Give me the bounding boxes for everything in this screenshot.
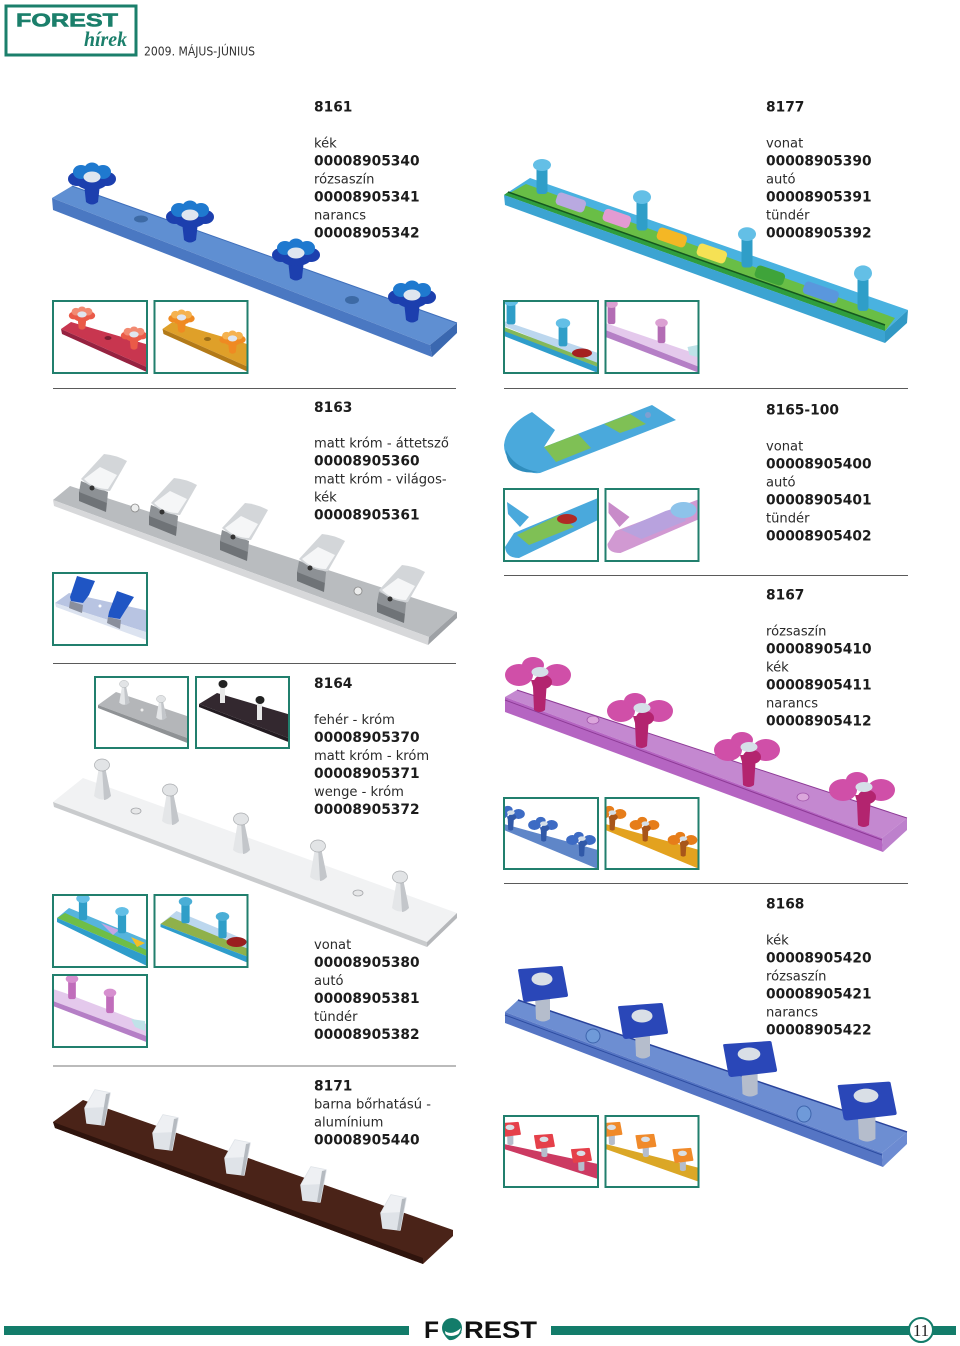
product text 8171: barna bőrhatású - xyxy=(314,1098,431,1112)
logo: Forest hírek: hírek xyxy=(84,27,127,51)
logo: Forest hírek xyxy=(6,6,136,55)
product text 8168: 00008905420 xyxy=(766,950,872,966)
product text 8167: narancs xyxy=(766,696,818,712)
product text 8165-100: vonat xyxy=(766,440,803,454)
product text 8161 xyxy=(314,100,420,242)
product text 8167 xyxy=(766,588,872,730)
product text 8161: rózsaszín xyxy=(314,172,374,188)
product text 8164: 00008905371 xyxy=(314,766,420,782)
thumbnail: fairy hook xyxy=(606,489,700,561)
product text 8165-100: 8165-100 xyxy=(766,402,839,418)
product text 8171: 00008905440 xyxy=(314,1132,420,1148)
thumbnail: matt chrome xyxy=(95,677,190,748)
product text 8165-100: tündér xyxy=(766,512,810,526)
product text 8163: 8163 xyxy=(314,400,352,416)
product text 8165-100: 00008905402 xyxy=(766,528,872,544)
product text 8167: kék xyxy=(766,660,789,676)
logo: Forest hírek: FOREST xyxy=(16,10,119,30)
product text 8164: wenge - króm xyxy=(314,785,404,800)
product text 8167: 00008905410 xyxy=(766,642,872,658)
product text 8165-100 xyxy=(766,402,872,544)
product: white chrome rack xyxy=(53,759,457,947)
thumbnail: wenge xyxy=(196,677,291,748)
product text 8164: matt króm - króm xyxy=(314,749,429,764)
product text 8165-100: autó xyxy=(766,476,795,490)
product: train coat rack xyxy=(504,159,908,343)
panel: 8177 variants xyxy=(53,894,420,1047)
product text 8164: 00008905370 xyxy=(314,730,420,746)
thumbnail: train peg xyxy=(53,894,149,967)
text: train, car, fairy codes xyxy=(314,938,420,1043)
product text 8164 xyxy=(314,676,429,818)
product: chrome and glass rack xyxy=(53,454,457,645)
product text 8161: 00008905342 xyxy=(314,226,420,242)
product text 8163: matt króm - áttetsző xyxy=(314,436,449,452)
panel: 8163 xyxy=(53,400,457,645)
product text 8171 xyxy=(314,1078,431,1148)
panel: 8171 xyxy=(53,1078,453,1264)
product: blue square knob rack xyxy=(505,966,907,1167)
product text 8164: 00008905372 xyxy=(314,802,420,818)
text: train, car, fairy codes: 00008905381 xyxy=(314,991,420,1007)
product text 8177 xyxy=(766,100,872,242)
thumbnail: light blue variant xyxy=(53,573,149,645)
thumbnail: car peg xyxy=(154,895,248,967)
product text 8177: 8177 xyxy=(766,100,804,116)
product text 8163: 00008905360 xyxy=(314,454,420,470)
product text 8163: kék xyxy=(314,490,337,506)
product text 8167: rózsaszín xyxy=(766,624,826,640)
product text 8163: 00008905361 xyxy=(314,508,420,524)
product text 8168: 8168 xyxy=(766,896,804,912)
panel: 8161 xyxy=(52,100,457,373)
product text 8168: rózsaszín xyxy=(766,970,826,984)
product: curved child hook xyxy=(504,405,676,473)
product text 8164: 8164 xyxy=(314,676,352,692)
product text 8177: tündér xyxy=(766,208,810,224)
thumbnail: pink variant xyxy=(53,301,149,373)
product: blue flower rack xyxy=(52,162,457,357)
product text 8165-100: 00008905401 xyxy=(766,492,872,508)
product text 8161: kék xyxy=(314,136,337,152)
product text 8168: 00008905422 xyxy=(766,1022,872,1038)
thumbnail: car hook xyxy=(504,489,598,561)
product text 8164: fehér - króm xyxy=(314,713,395,728)
panel: 8164 xyxy=(53,676,457,947)
panel: 8167 xyxy=(495,588,907,869)
footer logo: REST xyxy=(464,1317,537,1344)
product text 8171: 8171 xyxy=(314,1078,352,1094)
page number: 11 xyxy=(913,1321,929,1340)
product text 8171: alumínium xyxy=(314,1116,383,1130)
thumbnail: orange variant xyxy=(154,301,250,373)
product text 8167: 8167 xyxy=(766,588,804,604)
thumbnail: orange clover xyxy=(597,798,700,869)
product text 8161: 00008905341 xyxy=(314,190,420,206)
product text 8168: 00008905421 xyxy=(766,986,872,1002)
page number xyxy=(909,1318,933,1342)
thumbnail: fairy peg xyxy=(53,975,149,1047)
product text 8167: 00008905411 xyxy=(766,678,872,694)
thumbnail: car variant xyxy=(504,296,598,373)
product text 8168 xyxy=(766,896,872,1038)
thumbnail: blue clover xyxy=(495,798,598,869)
text: train, car, fairy codes: 00008905380 xyxy=(314,955,420,971)
product text 8167: 00008905412 xyxy=(766,714,872,730)
product text 8161: 8161 xyxy=(314,100,352,116)
thumbnail: fairy variant xyxy=(605,300,700,373)
product text 8168: kék xyxy=(766,934,789,948)
thumbnail: pink square xyxy=(500,1116,598,1187)
footer xyxy=(4,1317,956,1344)
thumbnail: orange square xyxy=(601,1116,700,1187)
panel: 8177 xyxy=(504,100,908,373)
footer logo xyxy=(424,1317,537,1344)
product text 8161: 00008905340 xyxy=(314,154,420,170)
product text 8165-100: 00008905400 xyxy=(766,456,872,472)
panel: 8165-100 xyxy=(504,402,872,561)
product text 8163 xyxy=(314,400,449,524)
product text 8177: autó xyxy=(766,172,795,188)
product text 8177: 00008905392 xyxy=(766,226,872,242)
product text 8168: narancs xyxy=(766,1006,818,1020)
product text 8177: 00008905390 xyxy=(766,154,872,170)
product: brown leather rack xyxy=(53,1090,453,1264)
issue date: 2009. MÁJUS-JÚNIUS xyxy=(144,44,255,58)
text: train, car, fairy codes: tündér xyxy=(314,1010,358,1025)
product text 8161: narancs xyxy=(314,208,366,224)
text: train, car, fairy codes: vonat xyxy=(314,938,351,953)
product text 8177: 00008905391 xyxy=(766,190,872,206)
panel: 8168 xyxy=(500,896,907,1187)
product: purple clover rack xyxy=(505,657,907,852)
text: train, car, fairy codes: autó xyxy=(314,974,343,989)
footer logo: F xyxy=(424,1317,439,1344)
product text 8163: matt króm - világos- xyxy=(314,472,447,488)
text: train, car, fairy codes: 00008905382 xyxy=(314,1027,420,1043)
product text 8177: vonat xyxy=(766,136,803,152)
